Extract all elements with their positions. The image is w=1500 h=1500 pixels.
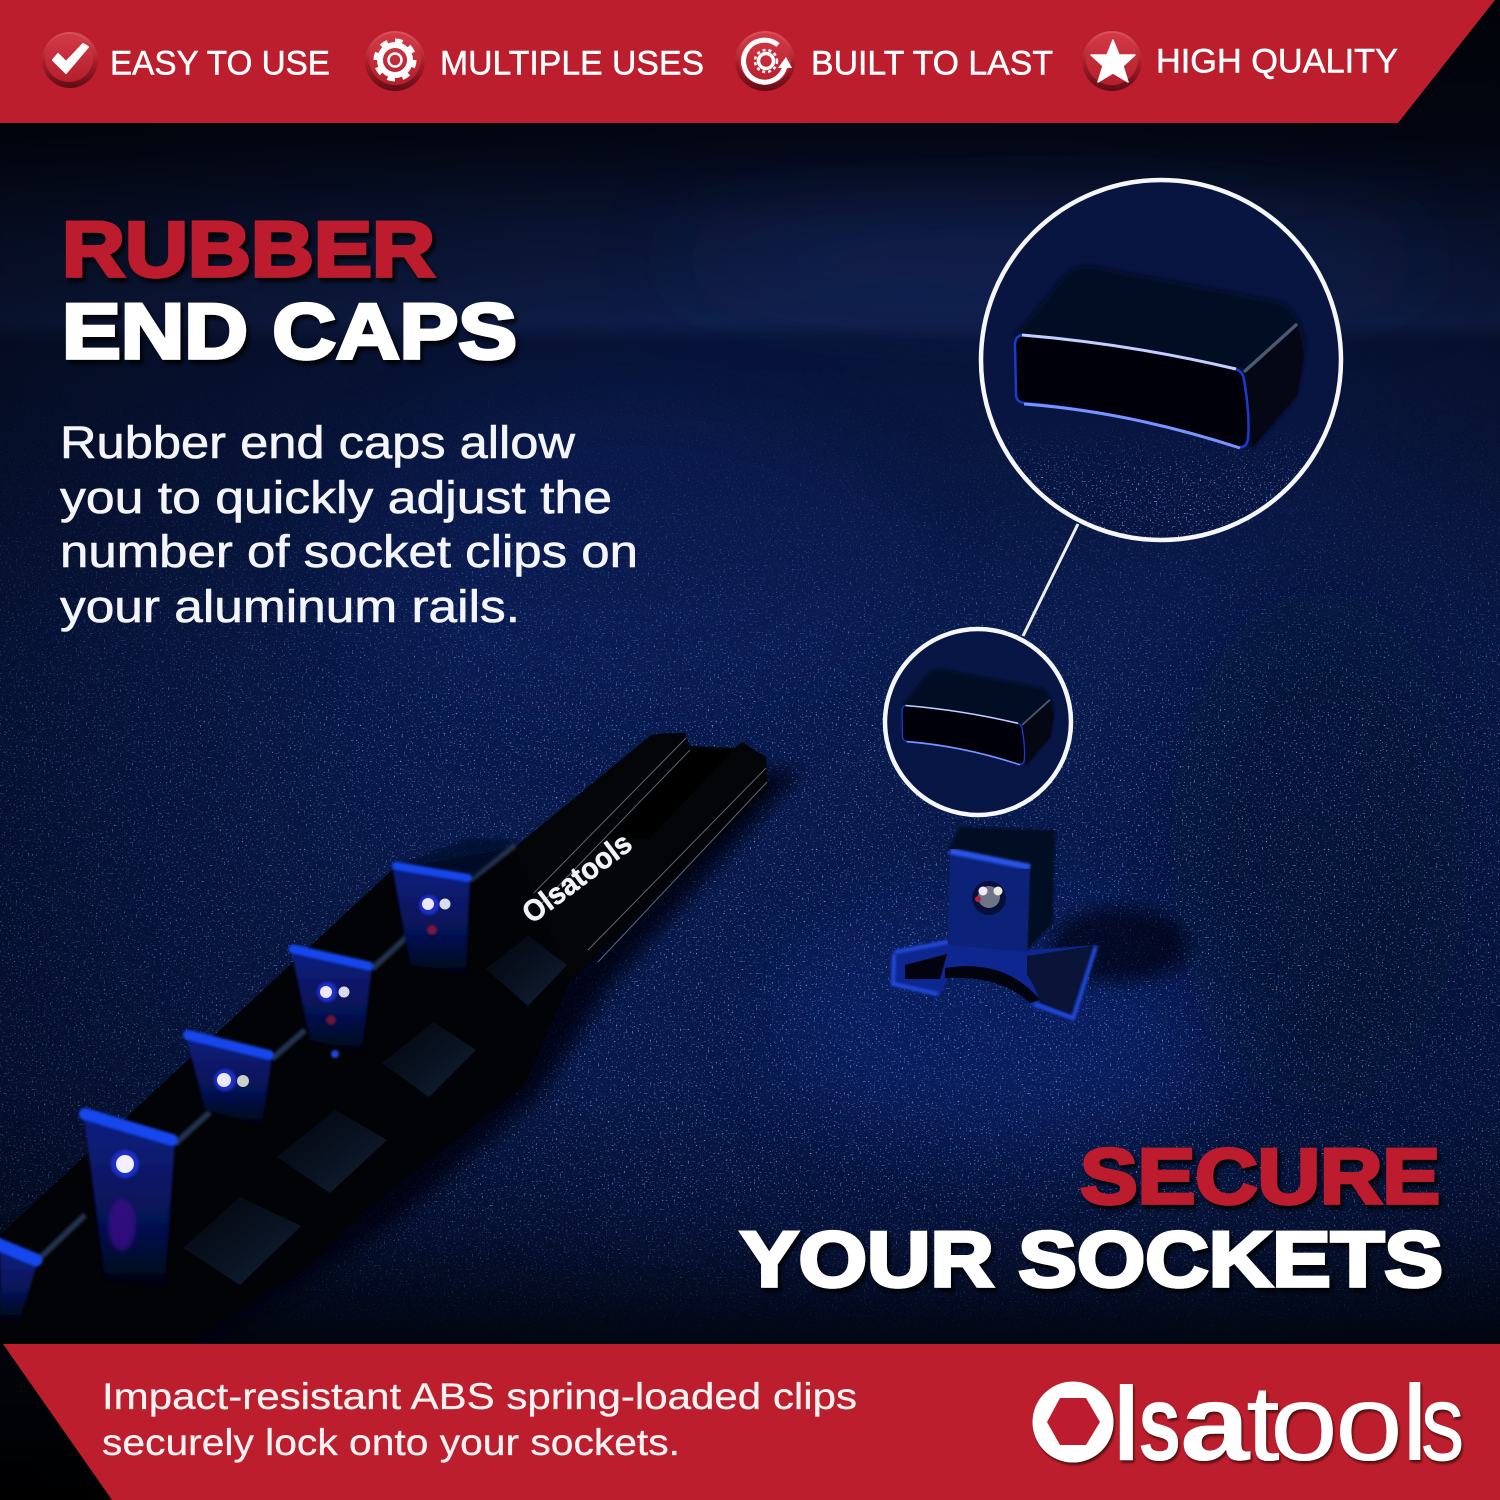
body text: end caps description: your aluminum rails. — [60, 581, 520, 632]
heading: secure your sockets: YOUR SOCKETS — [740, 1215, 1443, 1303]
icon: star — [1082, 31, 1142, 91]
bottom banner — [3, 1344, 1500, 1500]
clip blocks — [183, 936, 567, 1285]
body text: end caps description: Rubber end caps allow — [60, 417, 576, 468]
aluminium rail end — [470, 733, 768, 982]
clip faces — [0, 838, 515, 1320]
rail edge between clips — [36, 845, 515, 1262]
Olsatools logo: tool — [1246, 1363, 1428, 1483]
icon: gear — [365, 31, 425, 91]
bottom description text — [102, 1376, 857, 1463]
bottom description text: Impact-resistant ABS spring-loaded clips — [102, 1376, 857, 1417]
rail logo: Olsatools — [516, 827, 638, 930]
clip top highlights — [0, 866, 468, 1260]
Olsatools logo: s — [1421, 1362, 1464, 1483]
large magnifier circle: rubber end cap — [980, 180, 1342, 542]
heading: rubber end caps: END CAPS — [62, 287, 517, 375]
heading: rubber end caps — [62, 205, 517, 375]
icon: check mark — [42, 32, 98, 88]
Olsatools logo: a — [1180, 1362, 1251, 1483]
body text: end caps description: number of socket clips on — [60, 526, 638, 577]
heading: secure your sockets: SECURE — [1080, 1132, 1440, 1220]
icon: gear with refresh arrow — [735, 31, 795, 91]
small magnifier circle: end cap in place — [885, 629, 1071, 815]
socket rail with clips — [0, 733, 800, 1345]
heading: rubber end caps: RUBBER — [62, 205, 435, 293]
heading: secure your sockets — [740, 1132, 1443, 1303]
body text: end caps description: you to quickly adjust the — [60, 472, 612, 523]
magnifier connector line — [1023, 524, 1078, 636]
clip spring base — [893, 940, 1098, 1021]
clip block — [948, 827, 1055, 951]
clip ball bearings — [108, 895, 450, 1251]
Olsatools logo: Ol — [1035, 1366, 1140, 1483]
Olsatools logo — [1032, 1362, 1464, 1483]
top banner — [0, 0, 1495, 123]
Olsatools logo: s — [1138, 1362, 1181, 1483]
label: easy to use: EASY TO USE — [110, 44, 330, 82]
label: multiple uses: MULTIPLE USES — [440, 44, 704, 82]
label: built to last: BUILT TO LAST — [811, 44, 1053, 82]
rail shadow — [0, 770, 800, 1345]
label: high quality: HIGH QUALITY — [1156, 42, 1398, 80]
clip row body — [0, 847, 570, 1345]
body text: end caps description — [60, 417, 638, 632]
bottom description text: securely lock onto your sockets. — [102, 1422, 680, 1463]
standalone socket clip — [893, 827, 1098, 1021]
